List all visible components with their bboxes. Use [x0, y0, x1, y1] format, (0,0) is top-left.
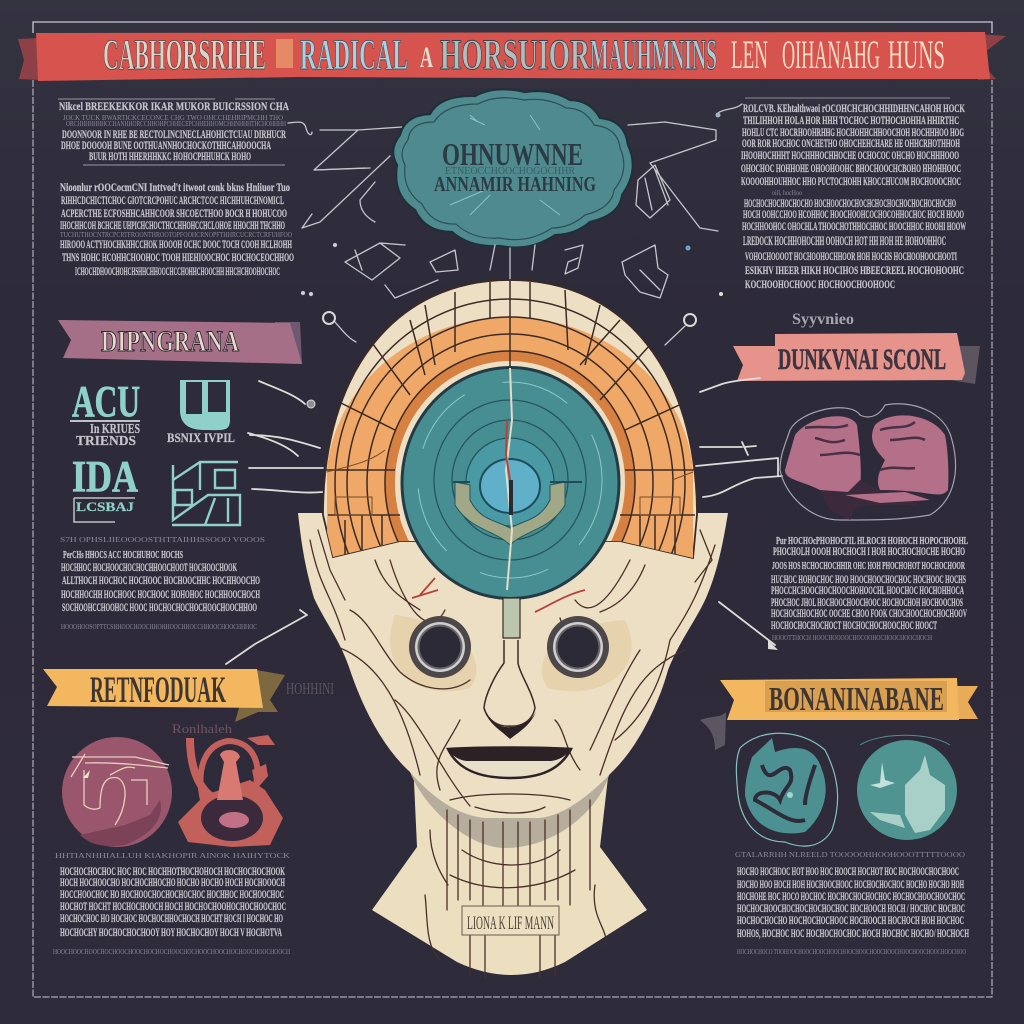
illustration: teal globe with ship: [857, 735, 957, 840]
text block: top left intro: [58, 99, 290, 165]
text block: left middle: PerCHs HHOCS ACC HOCHUHOC HOCHS: [63, 550, 183, 561]
text block: top right: oill, hocHoo: [772, 188, 802, 197]
illustration: coral figure: [172, 721, 283, 847]
teal disc: [400, 366, 620, 600]
text block: top right: [741, 98, 966, 291]
right eye: [547, 616, 609, 678]
title text: MAUHMNINS: [590, 32, 717, 79]
banner: left yellow: HOHHINI: [286, 679, 334, 698]
text block: right middle: [771, 536, 968, 642]
icon: acu logo: [70, 377, 140, 449]
banner: left mauve: [58, 320, 302, 364]
text block: top left body: IHOCHHCOH BCHCHE UHPICHCHOCTHCCHHOHCCHCLOHOE HHOCHH THCHHO: [60, 220, 285, 232]
text block: left bottom: HOCHOCHY HOCHOCHOCHOOY HOY HOCHOCHOY HOCH V HOCHOTVA: [60, 927, 282, 939]
banner: right yellow: [720, 678, 978, 720]
text block: top left body: Nioonlur rOOCocmCNI Inttvod't itwoot conk bkns Hniiuor Tuo: [60, 182, 290, 194]
neck label plate: [462, 906, 559, 935]
central crack: [506, 368, 512, 590]
title text: OIHANAHG: [782, 32, 880, 77]
banner: left mauve: DIPNGRANA: [101, 325, 239, 358]
text block: top left intro: JOCK TUCK BWARTICKCECONCE CHG TWO OHCCHEHRIPMCHH THO: [63, 113, 284, 122]
text block: left bottom: HHTIANHHIALLUH KIAKHOPIR AINOK HAIHYTOCK: [55, 851, 291, 860]
text block: top left body: RIHHCDCHICTICHOC GIOTCRCPOHUC ARCHCTCOC HICHHUHCHNOMICL: [61, 195, 284, 207]
title text: RADICAL: [300, 32, 408, 79]
text block: left bottom: [53, 851, 291, 956]
icon: acu logo: TRIENDS: [76, 434, 136, 449]
icon: building sketch: [172, 462, 240, 525]
text block: left bottom: HOCHOCHOC HO HOCHOC HOCHOCHHOCHOCH HOCHT HOCH I HOCHOC HO: [60, 913, 283, 925]
icon: u shape logo: [167, 380, 235, 445]
title text: LEN: [731, 32, 768, 77]
cloud text: [434, 136, 596, 196]
text block: top left body: [60, 182, 294, 278]
text block: left middle: [60, 535, 265, 631]
red veins: [412, 578, 585, 612]
neck shadow: [410, 772, 610, 848]
text block: top left intro: DOONNOOR IN RHE BE RECTOLINCINECLAHOHICTCUAU DIRHUCR: [62, 129, 286, 141]
text block: top left body: THNS HOHC HCOHHCHOOHOC TOOH HIEHIOOCHOC HOCHOCEOCHHOO: [62, 252, 294, 264]
thought cloud: [393, 89, 633, 248]
eye shadows: [390, 615, 632, 691]
banner: right pink: [733, 333, 980, 384]
nose: [484, 640, 536, 739]
left eye: [409, 616, 471, 678]
text: ICHOCHDHOOCHOHCHSHHCHHOOCHCCHOHHCHOOCHH HHCHCHOOHOCHOC: [75, 266, 280, 278]
face: [298, 513, 728, 818]
text block: top left body: ACPERCTHE ECFOSHHCAHHCOOR SHCOECTHOO BOCR H HOHUCOO: [61, 208, 287, 220]
text block: left bottom: HOOCHOOCHOOCHOCHOOCHOOCHOCHOCHOOCHOCHOOCHOOCHOCHOOCHOOCHOOCH: [53, 947, 290, 956]
sketch diagrams above head: [302, 243, 668, 298]
nasal bridge plate: [503, 598, 520, 638]
title ribbon: [18, 32, 1006, 81]
text block: left bottom: HOCHOT HOCHT HOCHOCHOOCH HOCH HOCHOCHOOHOCHOCHOOCHOC: [60, 901, 286, 913]
icon: acu logo: ACU: [72, 377, 140, 426]
cloud text: ETNEOCCHOOCHOGOCHHR: [445, 166, 575, 177]
title text: CABHORSRIHE: [103, 32, 266, 79]
text block: left bottom: HOCCHOOCHOC HO HOCHOOCHOCHOCHOCHOC HOCHHOC HOCHOOCHOC: [60, 889, 284, 901]
text block: top left body: TUCHUTHOCNTRCPCRTFROONTHROOTOPFOOHCRNOPFTHHRCUCRCTCRFUHFOO: [60, 230, 292, 239]
neck label plate: LIONA K LIF MANN: [467, 913, 554, 934]
small label: right upper: Syyvnieo: [792, 311, 854, 328]
text block: top right: KOCHOOHOCHOOC HOCHOOCHOOHOOC: [745, 279, 895, 291]
text block: right middle: HOOOTTHOCH HOOCHOOOOCHOCOOHOCHOOCHOOCHOCH: [772, 633, 932, 642]
icons: left teal glyph grid: [70, 377, 240, 525]
orange brain bands: [326, 280, 695, 558]
title text: HUNS: [888, 32, 945, 77]
shield core: [455, 482, 565, 545]
head illustration: [298, 280, 728, 978]
connector lines: cloud right: [628, 104, 742, 296]
connector lines: cloud left: [288, 122, 402, 228]
text block: right bottom: GTALARRHH NLREELD TOOOOOHHOOHOOOTTTTTOOOO: [735, 850, 966, 859]
banner: left yellow: RETNFODUAK: [90, 670, 226, 711]
text block: top left intro: Nikcel BREEKEKKOR IKAR MUKOR BUICRSSION CHA: [59, 101, 290, 113]
illustration: teal swirl: [700, 712, 838, 846]
icon: ina logo: [72, 452, 138, 522]
text block: top left intro: DHOE DOOOOH BUNE OOTHUANNHOCHOCKOTHHCAHOOOCHA: [61, 140, 271, 152]
brain illustration: [780, 404, 956, 520]
cloud text: ANNAMIR HAHNING: [434, 172, 596, 196]
text block: left bottom: HOCHOCHOCHOC HOC HOC HOCHHOTHOCHOHOCH HOCHOCHOCHOOK: [60, 866, 285, 878]
text block: top left body: HIROOO ACTYHOCHKHHCCHOK HOOOH OCHC DOOC TOCH COOH HCLHOHH: [60, 239, 292, 251]
text block: left middle: S7H OPHSLIIEOOOOSTHTTAIHHSSOOO VOOOS: [60, 535, 265, 544]
neck: [372, 760, 647, 975]
illustration: pink sphere: [62, 737, 172, 847]
text block: top left intro: BUUR HOTH HHERHHKKC HOHOCPHHUHCK HOHO: [89, 151, 251, 163]
icon: ina logo: IDA: [72, 452, 138, 501]
icon: acu logo: In KRIUES: [90, 422, 140, 437]
text block: left middle: ALLTHOCH HOCHOC HOCHOOC HOCHOOCHHC HOCHHOOCHO: [62, 575, 260, 587]
text block: left bottom: HOCH HOCHOOCHO HOCHOCHHOCHO HOCHO HOCHO HOCH HOCHOOOCH: [60, 877, 285, 889]
text block: right bottom: [735, 850, 969, 956]
cloud text: OHNUWNNE: [442, 136, 583, 172]
icon: u shape logo: BSNIX IVPIL: [167, 430, 235, 445]
face crack lines: [310, 530, 715, 813]
title text: HORSUIOR: [440, 32, 591, 79]
text block: left middle: SOCHOOHCCHOOHOC HOOC HOCHOCHOCHOCHOOCHOOCHHOO: [62, 602, 257, 614]
title text: [103, 32, 945, 79]
neck lines: [425, 800, 606, 978]
text block: top left intro: ORCHHHHHHHCCHANHHORCCHHOHPCHHECEPCHHEHHOMCHHNHHHTHCHOHHHH: [66, 119, 286, 128]
cranium dome: [323, 280, 697, 558]
leader lines: left of head: [226, 312, 696, 664]
illustration: coral figure: Ronlhaleh: [172, 721, 233, 736]
leader lines: right of head: [696, 378, 782, 650]
banner: left yellow: [43, 669, 334, 722]
text block: left middle: HOCHHOC HOCHOOCHOCHOCHHOOCHOOT HOCHOOCHOOK: [61, 562, 237, 574]
text block: left middle: HOCHHOCHH HOCHOOC HOCHOOC HOHOHOC HOCHHOOCHOCH: [61, 589, 260, 601]
title text: A: [420, 41, 433, 74]
text block: left middle: HOOOHOOSOPTTCSHHOOCHOOCHHOHHOOCHHOCCHHOOCHOOCHHHOC: [61, 622, 257, 631]
mouth: [448, 747, 571, 778]
icon: ina logo: LCSBAJ: [76, 499, 135, 514]
